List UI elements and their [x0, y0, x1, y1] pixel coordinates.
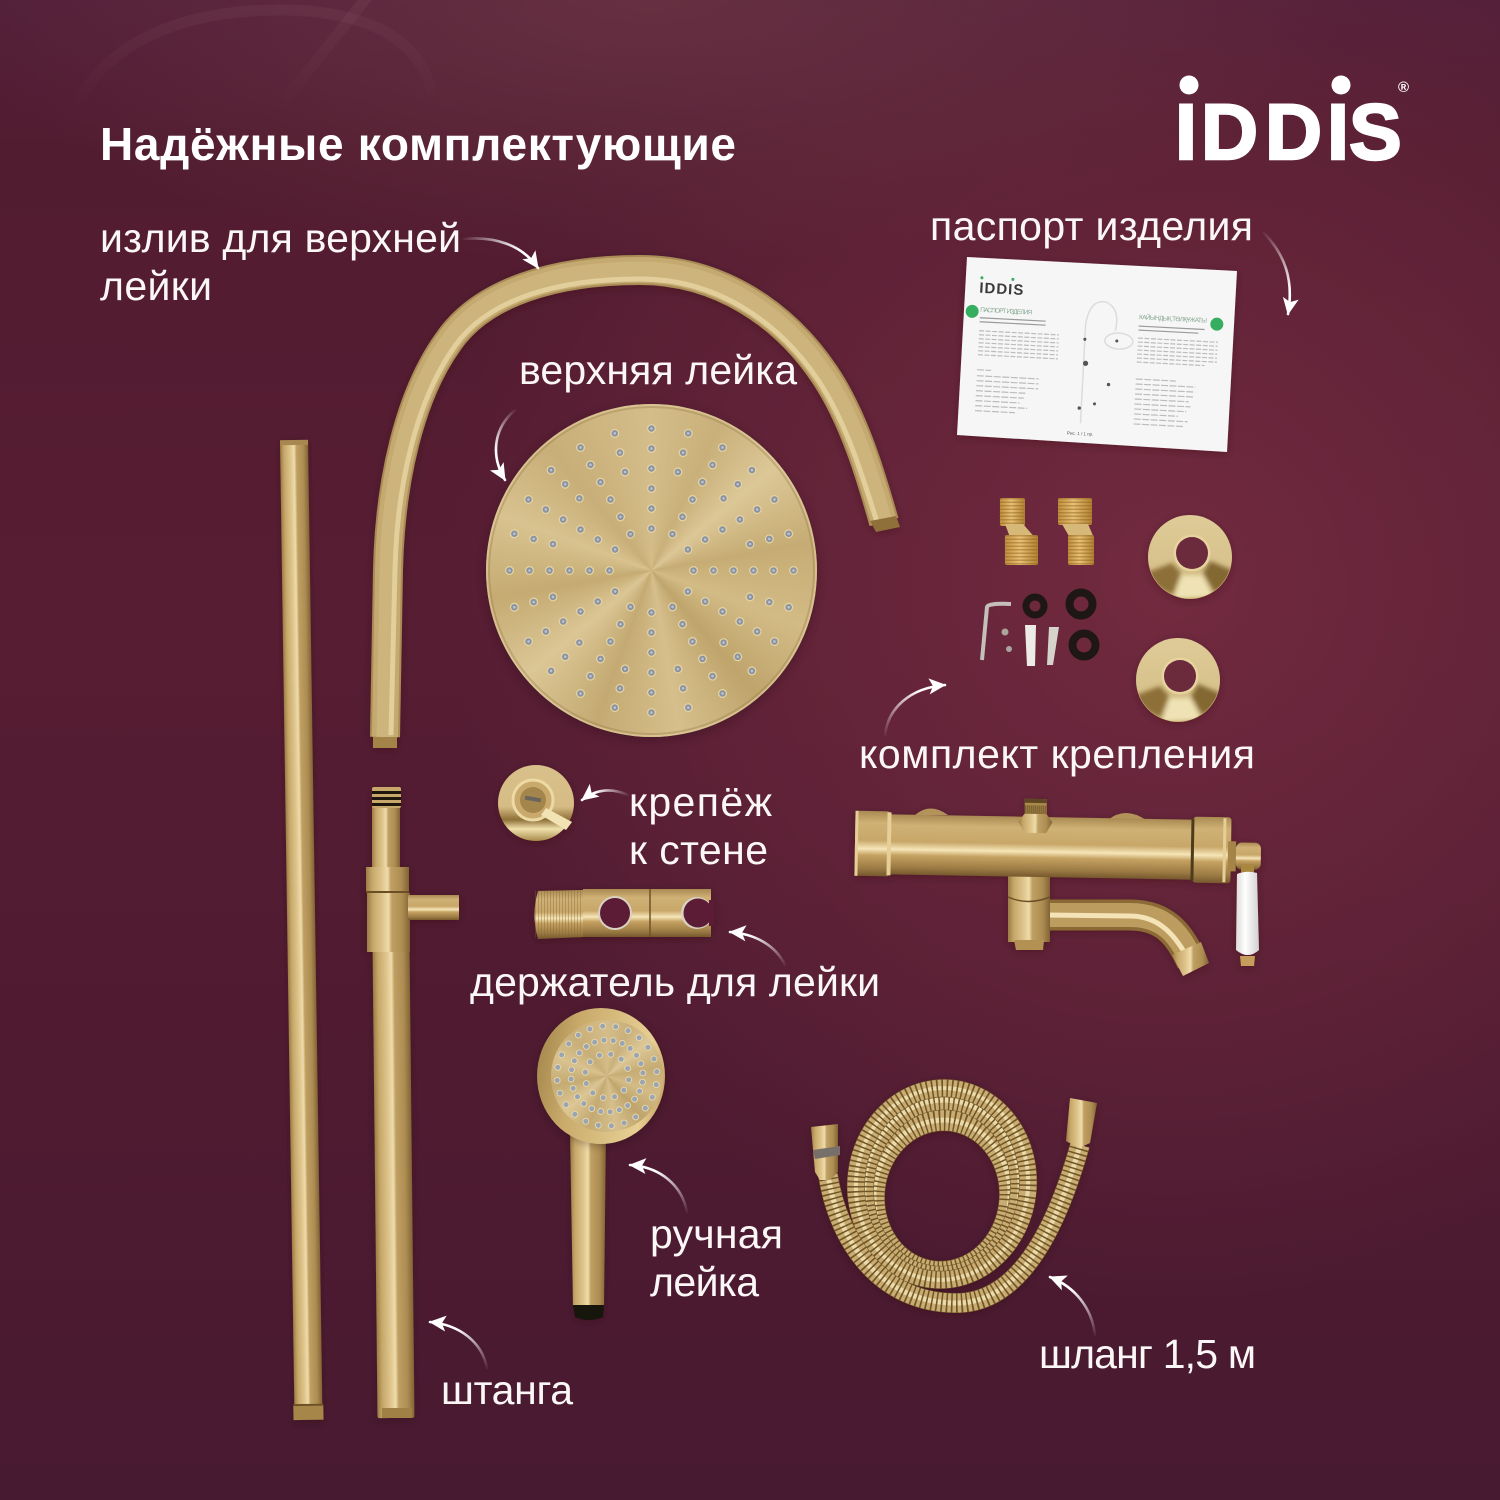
bath mixer	[854, 796, 1262, 976]
label: holder: держатель для лейки	[470, 959, 880, 1005]
product parts	[100, 76, 1409, 1421]
arrow: hose	[1050, 1277, 1095, 1335]
logo: IDDIS	[1175, 87, 1402, 176]
hand shower head	[537, 1008, 665, 1144]
product passport: КАЙЫНДЫҚ ТӨЛҚҰЖАТЫ	[1139, 312, 1207, 325]
flexible hose	[811, 1080, 1097, 1303]
washers	[1026, 592, 1096, 656]
label: wall mount	[629, 779, 773, 873]
hand shower handle	[570, 1130, 606, 1320]
label: spout: лейки	[100, 263, 212, 309]
arrow: mounting kit	[885, 685, 945, 735]
escutcheon lower	[1134, 638, 1222, 722]
product passport: Рис. 1 / 1 пр.	[1067, 430, 1093, 437]
arrow: passport	[1264, 233, 1290, 314]
hand shower face	[551, 1020, 663, 1132]
label: spout: излив для верхней	[100, 215, 461, 261]
mixer spout	[1045, 915, 1209, 976]
title: Надёжные комплектующие	[100, 118, 736, 170]
product passport: IDDIS	[979, 280, 1024, 299]
left straight bar	[279, 440, 324, 1420]
arrows	[430, 233, 1290, 1368]
label: mounting kit: комплект крепления	[859, 731, 1255, 777]
arrow: top shower	[496, 410, 515, 480]
arrow: hand shower	[630, 1165, 687, 1212]
dowel and screw	[1002, 625, 1059, 666]
product passport: ПАСПОРТ ИЗДЕЛИЯ	[980, 307, 1033, 316]
label: hose: шланг 1,5 м	[1039, 1331, 1256, 1377]
product passport	[957, 257, 1237, 452]
holder for hand shower	[534, 889, 714, 939]
overhead spout arc	[373, 270, 900, 748]
mounting kit	[982, 498, 1234, 722]
label: hand shower: ручная	[650, 1211, 783, 1257]
hex key	[982, 604, 1011, 660]
brass fittings	[1000, 498, 1094, 565]
label: passport: паспорт изделия	[930, 203, 1253, 249]
arrow: spout	[464, 238, 538, 268]
escutcheon upper	[1146, 515, 1234, 599]
label: hand shower	[650, 1211, 783, 1305]
wall mount flange	[498, 765, 574, 841]
label: hand shower: лейка	[650, 1259, 759, 1305]
logo: ®	[1398, 79, 1409, 96]
arrow: wall mount	[582, 790, 628, 800]
slide rail with diverter	[366, 787, 459, 1418]
label: spout	[100, 215, 461, 309]
arrow: holder	[730, 932, 785, 965]
label: top shower: верхняя лейка	[519, 347, 797, 393]
arrow: rail	[430, 1322, 487, 1368]
label: wall mount: крепёж	[629, 779, 773, 825]
mixer lever	[1236, 864, 1259, 966]
label: rail: штанга	[441, 1367, 573, 1413]
top shower head	[486, 404, 817, 737]
label: wall mount: к стене	[629, 827, 768, 873]
